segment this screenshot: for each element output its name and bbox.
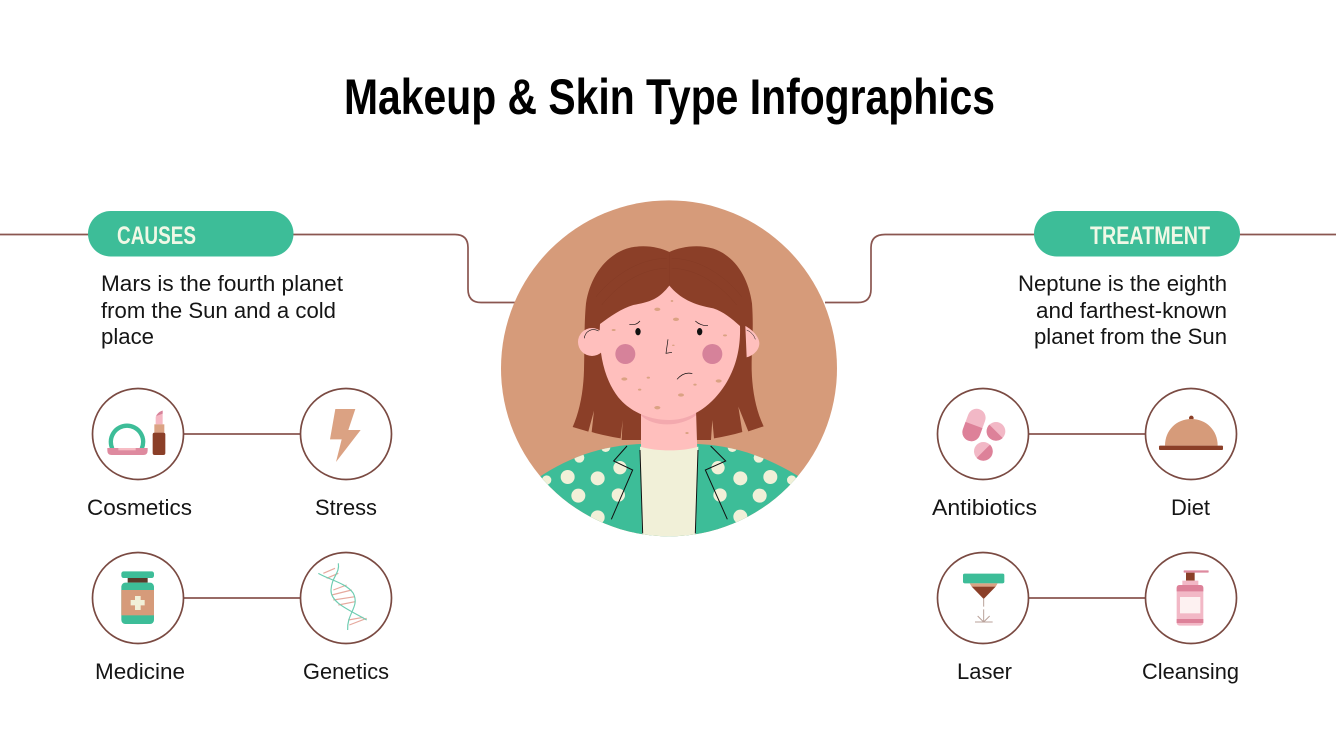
connector: causes to portrait [0, 234, 515, 302]
connector: cosmetics to stress [183, 433, 301, 435]
acne spots [612, 300, 727, 434]
lapel lines [611, 446, 727, 533]
icon: diet cloche [1146, 388, 1236, 480]
text block: causes description [101, 271, 343, 349]
icon: medicine bottle [92, 552, 184, 644]
text block: treatment description [1018, 271, 1227, 349]
panel: causes header [88, 211, 294, 256]
label: stress: Stress [315, 495, 377, 520]
treatment items [938, 388, 1236, 644]
icon: genetics dna [300, 552, 392, 644]
shirt [640, 446, 698, 536]
nose and mouth [666, 339, 692, 379]
title: Makeup & Skin Type Infographics [344, 69, 995, 125]
label: cosmetics: Cosmetics [87, 495, 192, 520]
icon: laser [938, 552, 1028, 644]
connector: treatment to portrait [825, 234, 1336, 302]
label: diet: Diet [1171, 495, 1210, 520]
icon: cleansing pump bottle [1146, 552, 1236, 644]
connector: antibiotics to diet [1028, 433, 1146, 435]
eyes and brows [635, 328, 641, 335]
icon: stress lightning [300, 388, 392, 480]
jacket polka dots [542, 443, 796, 524]
heading: causes: CAUSES [117, 222, 196, 250]
connector: medicine to genetics [183, 597, 301, 599]
neck [641, 410, 697, 452]
label: antibiotics: Antibiotics [932, 495, 1037, 520]
text block: treatment description: and farthest-known [1036, 298, 1227, 323]
text block: causes description: Mars is the fourth planet [101, 271, 343, 296]
cause items [92, 388, 392, 644]
hair [573, 246, 764, 440]
portrait: girl with acne [501, 200, 837, 557]
heading: treatment: TREATMENT [1090, 222, 1210, 250]
ears [578, 328, 601, 356]
panel: treatment header [1034, 211, 1240, 256]
cheeks [615, 344, 635, 364]
face [600, 286, 740, 420]
text block: causes description: from the Sun and a cold [101, 298, 336, 323]
icon: cosmetics [92, 388, 184, 480]
icon: antibiotics pills [938, 388, 1028, 480]
text block: treatment description: Neptune is the eighth [1018, 271, 1227, 296]
label: laser: Laser [957, 659, 1012, 684]
text block: treatment description: planet from the Sun [1034, 324, 1227, 349]
connector: laser to cleansing [1028, 597, 1146, 599]
jacket [540, 444, 798, 536]
label: medicine: Medicine [95, 659, 185, 684]
label: genetics: Genetics [303, 659, 389, 684]
text block: causes description: place [101, 324, 154, 349]
label: cleansing: Cleansing [1142, 659, 1239, 684]
